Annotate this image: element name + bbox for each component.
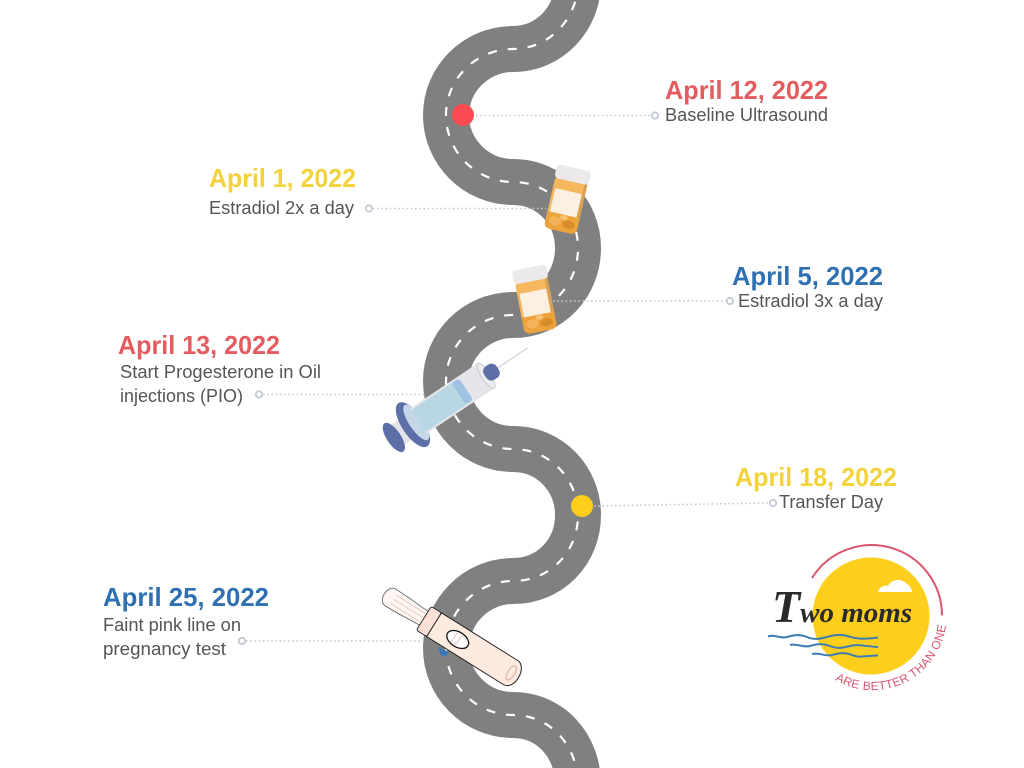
label: April 25: Faint pink line on [103, 615, 241, 635]
label: April 5: April 5, 2022 [732, 261, 883, 291]
connector: pregnancy test [239, 638, 426, 644]
marker: yellow dot [571, 495, 593, 517]
label: April 18: April 18, 2022 [735, 462, 897, 492]
logo arc [812, 545, 942, 615]
logo tagline: ARE BETTER THAN ONE [835, 624, 946, 690]
label: April 13: April 13, 2022 [118, 330, 280, 360]
icon: pill bottle lower [512, 264, 558, 335]
label: April 13: injections (PIO) [120, 386, 243, 406]
label: April 12: April 12, 2022 [665, 75, 828, 105]
label: April 5 [732, 261, 883, 311]
label: April 13: Start Progesterone in Oil [120, 362, 321, 382]
label: April 13 [118, 330, 321, 406]
label: April 12: Baseline Ultrasound [665, 105, 828, 125]
connector: estradiol 3x [553, 298, 733, 304]
icon: pill bottle upper [543, 164, 591, 235]
connector: transfer day [594, 500, 776, 506]
icon: syringe [374, 326, 542, 463]
label: April 1 [209, 163, 356, 218]
label: April 18: Transfer Day [779, 492, 883, 512]
label: April 1: April 1, 2022 [209, 163, 356, 193]
icon: pregnancy test [377, 582, 526, 689]
label: April 18 [735, 462, 897, 512]
label: April 12 [665, 75, 828, 125]
label: April 25 [103, 582, 269, 659]
winding road [446, 0, 578, 768]
connector: progesterone [256, 391, 426, 398]
logo waves [768, 635, 878, 657]
connector: baseline ultrasound [476, 112, 658, 119]
label: April 1: Estradiol 2x a day [209, 198, 354, 218]
label: April 5: Estradiol 3x a day [738, 291, 883, 311]
logo wordmark: Two moms [772, 581, 912, 632]
icon: blue road mark under test [438, 647, 449, 657]
connector: estradiol 2x [366, 205, 546, 212]
logo cloud [878, 580, 912, 592]
logo sun [812, 558, 930, 674]
logo: Two moms [768, 544, 946, 690]
label: April 25: pregnancy test [103, 639, 226, 659]
marker: red dot [452, 104, 474, 126]
label: April 25: April 25, 2022 [103, 582, 269, 612]
